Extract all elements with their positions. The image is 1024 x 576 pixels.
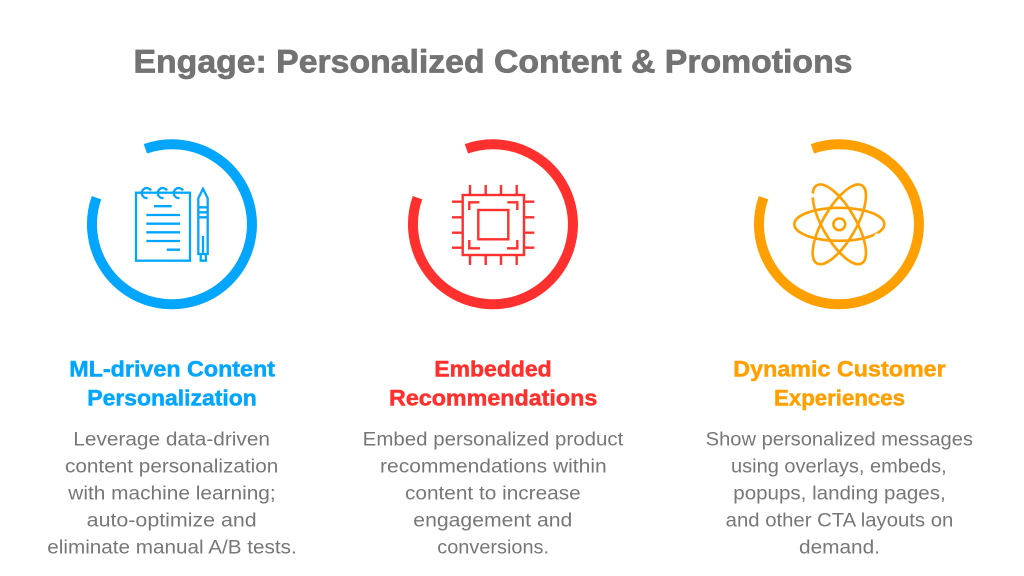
description text: and other CTA layouts on: [726, 511, 953, 532]
description text: [363, 430, 624, 559]
description text: demand.: [799, 538, 880, 559]
heading: ML-driven Content: [69, 357, 276, 382]
description text: Embed personalized product: [363, 430, 624, 451]
heading: Personalization: [87, 386, 257, 411]
icon: atom: [794, 177, 884, 272]
description text: conversions.: [437, 538, 549, 559]
heading: [69, 357, 276, 411]
panel: embedded recommendations: [363, 144, 624, 559]
description text: Show personalized messages: [706, 430, 973, 451]
icon: notebook and pen: [136, 188, 208, 261]
description text: popups, landing pages,: [733, 484, 946, 505]
description text: using overlays, embeds,: [731, 457, 947, 478]
panel: dynamic customer experiences: [706, 144, 973, 559]
heading: Dynamic Customer: [733, 357, 946, 382]
description text: eliminate manual A/B tests.: [47, 538, 297, 559]
heading: [389, 357, 597, 411]
heading: Embedded: [434, 357, 552, 382]
description text: recommendations within: [380, 457, 607, 478]
heading: Experiences: [774, 386, 905, 411]
title: Engage: Personalized Content & Promotions: [134, 44, 852, 80]
description text: [706, 430, 973, 559]
description text: engagement and: [413, 511, 572, 532]
ring: orange progress circle: [759, 144, 919, 304]
ring: blue progress circle: [92, 144, 252, 304]
icon: microchip: [452, 185, 534, 265]
description text: content to increase: [405, 484, 581, 505]
description text: with machine learning;: [67, 484, 276, 505]
description text: [47, 430, 297, 559]
description text: Leverage data-driven: [73, 430, 270, 451]
ring: red progress circle: [413, 144, 573, 304]
description text: auto-optimize and: [87, 511, 257, 532]
heading: [733, 357, 946, 411]
panel: ML-driven content personalization: [47, 144, 297, 559]
heading: Recommendations: [389, 386, 597, 411]
description text: content personalization: [65, 457, 278, 478]
